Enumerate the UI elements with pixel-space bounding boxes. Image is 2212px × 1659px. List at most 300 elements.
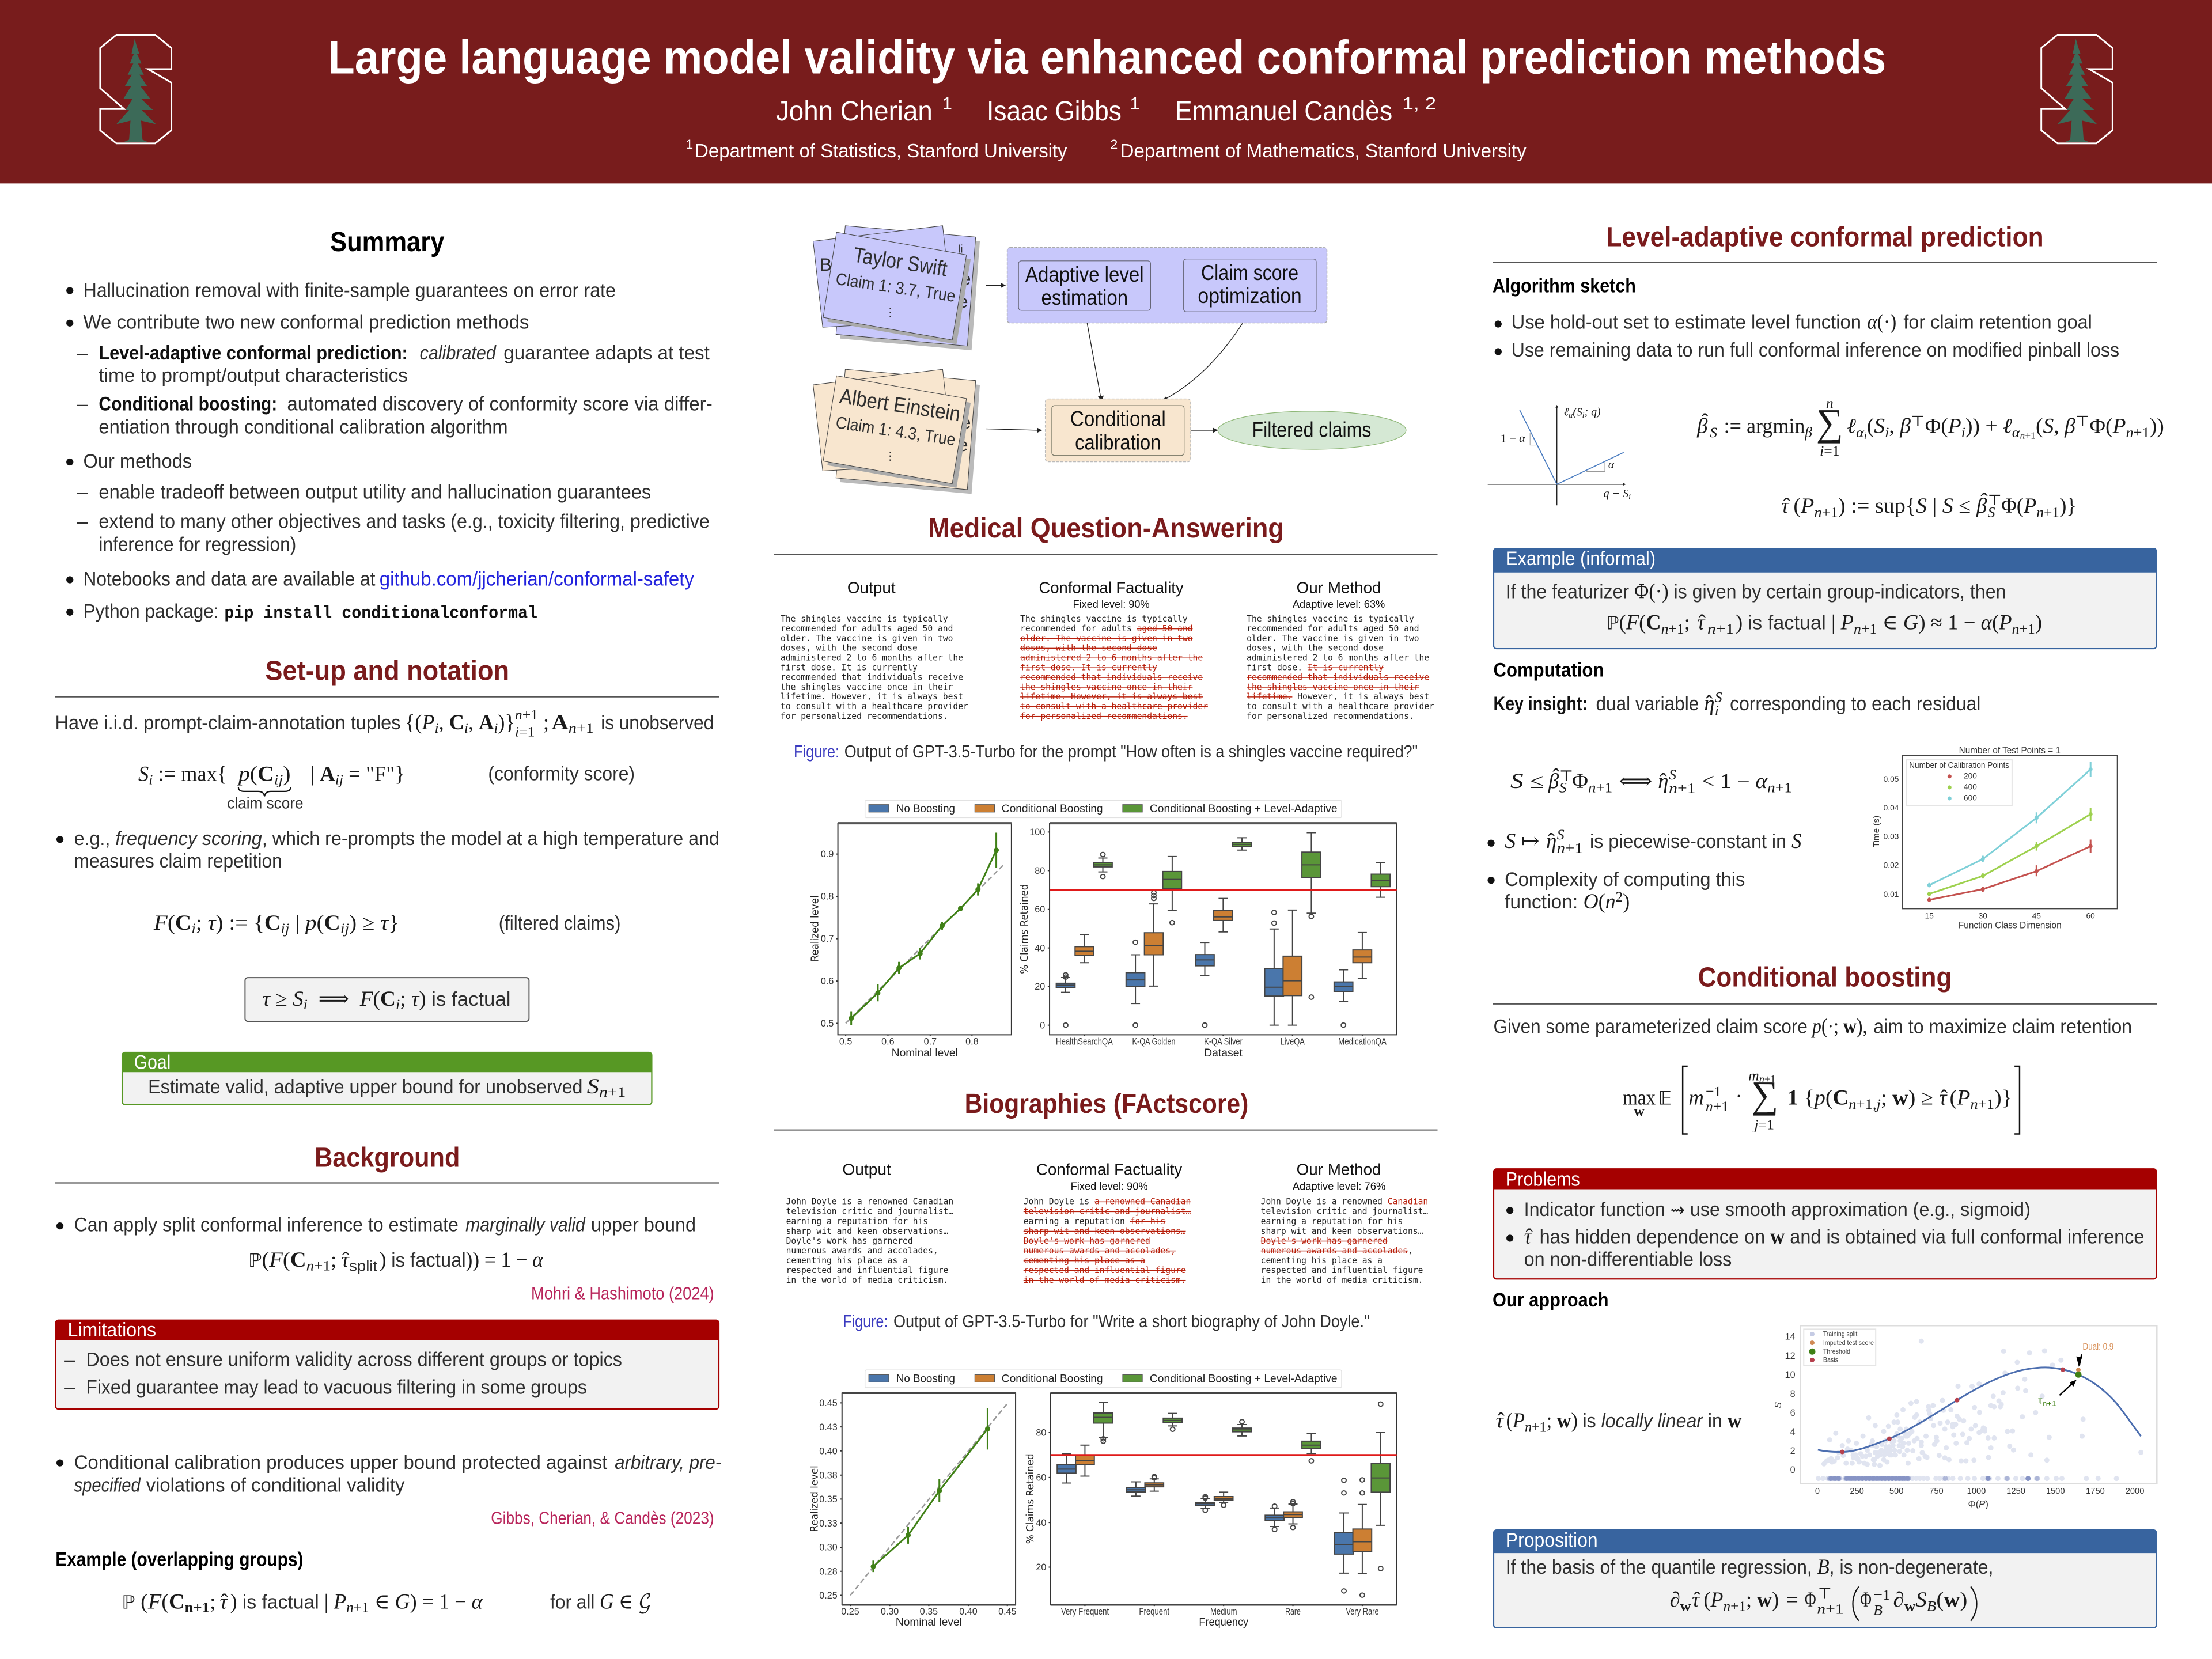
proposition block: τ <box>1692 1588 1700 1611</box>
objective formula: ∑ <box>1751 1074 1778 1116</box>
bio example: Our Method <box>1261 1160 1428 1285</box>
proposition block: n+1 <box>1817 1600 1844 1617</box>
scatter plot: quantile regression: 0 <box>1815 1487 1820 1496</box>
proposition block: Φ <box>1860 1588 1872 1611</box>
output example: Output: first dose. It is currently <box>781 663 918 673</box>
proposition block: −1 <box>1873 1586 1891 1603</box>
overlapping groups formula: ℙ (F(C <box>122 1590 184 1613</box>
locally linear statement: +1 <box>1532 1418 1547 1435</box>
claim score box: Claim score <box>1201 261 1298 285</box>
legend: Conditional Boosting <box>1002 802 1103 815</box>
proposition block: n <box>1723 1597 1730 1614</box>
scatter plot: quantile regression: 500 <box>1889 1487 1903 1496</box>
scatter plot: quantile regression: 8 <box>1790 1389 1796 1399</box>
calibration line chart <box>809 823 1012 1059</box>
authors: Emmanuel Candès <box>1175 96 1392 127</box>
output example: Conformal Factuality: The shingles vaccine is typically <box>1020 614 1188 624</box>
computation bullets: function: O(n <box>1505 889 1616 913</box>
objective formula: m <box>1748 1067 1759 1084</box>
sub-heading: our approach: Our approach <box>1493 1289 1609 1311</box>
example block: ℙ(F(C <box>1606 611 1661 634</box>
example block: If the featurizer Φ(·) is given by certain group-indicators, then <box>1506 579 2006 603</box>
runtime line chart <box>1872 745 2118 930</box>
goal block: n <box>599 1084 608 1100</box>
bio example: Output: respected and influential figure <box>786 1266 948 1275</box>
box plot: claims retained by dataset: 80 <box>1035 866 1045 876</box>
output example: Our Method: lifetime. However, it is always best <box>1247 692 1429 702</box>
objective formula: w <box>1634 1103 1645 1119</box>
pinball loss sketch: i <box>1628 493 1631 501</box>
goal block: Estimate valid, adaptive upper bound for unobserved <box>148 1076 582 1098</box>
calibration line chart: 0.30 <box>881 1607 899 1617</box>
arrows between stages <box>986 283 1250 432</box>
objective formula: n+1 <box>1706 1098 1729 1115</box>
citation: Mohri & Hashimoto (2024) <box>531 1284 714 1304</box>
goal block: S <box>587 1074 599 1098</box>
summary bullets: – <box>77 342 88 364</box>
algorithm bullets: α(·) <box>1867 310 1896 334</box>
split conformal bullet: Can apply split conformal inference to estimate <box>74 1214 459 1236</box>
card stack: Albert Einstein: ⋮ <box>885 449 896 463</box>
runtime line chart: 0.03 <box>1884 832 1899 841</box>
legend: No Boosting <box>896 1373 955 1385</box>
card stack: Taylor Swift: B <box>820 254 832 275</box>
intro sentence: aim to maximize claim retention <box>1873 1016 2132 1038</box>
panel: background <box>55 1142 721 1616</box>
calibration line chart: 0.8 <box>821 892 834 902</box>
output example: Our Method: for personalized recommendations. <box>1247 711 1414 721</box>
box plot: claims retained by dataset: LiveQA <box>1281 1037 1305 1047</box>
runtime line chart: 15 <box>1925 911 1934 920</box>
intro sentence: p(·; w), <box>1810 1014 1867 1038</box>
filtered claims formula: ij <box>281 920 289 937</box>
summary bullets: time to prompt/output characteristics <box>99 365 408 387</box>
pinball loss sketch: ; q) <box>1585 406 1601 418</box>
adaptive level box: Adaptive level <box>1025 263 1144 286</box>
scatter plot: quantile regression: 1250 <box>2006 1487 2025 1496</box>
argmin formula: i <box>1885 424 1889 441</box>
claim score box: optimization <box>1198 284 1302 308</box>
proposition block: ˆ <box>1694 1588 1700 1611</box>
split conformal bullet: marginally valid <box>465 1214 586 1236</box>
conformity score formula: (conformity score) <box>488 763 635 785</box>
filtered claims formula: | <box>289 911 305 934</box>
tuples sentence: ; <box>543 710 549 734</box>
box plot: claims retained by dataset: 20 <box>1035 982 1045 992</box>
summary bullets <box>66 279 713 623</box>
summary bullets: Conditional boosting: <box>99 393 277 415</box>
calibration line chart: 0.33 <box>819 1518 838 1529</box>
calibration line chart: 0.5 <box>821 1018 834 1029</box>
output example: Output: the shingles vaccine once in their <box>781 682 953 692</box>
tuples sentence: i <box>464 719 468 736</box>
scatter plot: quantile regression: 750 <box>1929 1487 1944 1496</box>
bio example: Our Method: television critic and journalist… <box>1261 1207 1428 1217</box>
scatter plot: quantile regression: 1000 <box>1967 1487 1986 1496</box>
limitations block: Limitations <box>68 1319 156 1341</box>
limitations block: – <box>64 1377 75 1399</box>
box plot: claims retained by dataset: 40 <box>1035 943 1045 953</box>
example block: n <box>1661 620 1668 637</box>
argmin formula: i <box>1961 424 1965 441</box>
output example: Output: to consult with a healthcare provider <box>781 702 968 711</box>
output example: Output: Output <box>847 578 896 596</box>
summary bullets: Python package: <box>83 601 219 623</box>
filtered claims formula: F(C <box>154 911 190 934</box>
dual equivalence formula: S ≤ <box>1510 769 1544 793</box>
factual implication box: ⟹ <box>308 987 360 1010</box>
summary bullets: Level-adaptive conformal prediction: <box>99 342 408 364</box>
runtime line chart: 0.02 <box>1884 861 1899 869</box>
heading: level-adaptive: Level-adaptive conformal prediction <box>1606 222 2044 252</box>
argmin formula: S <box>1874 414 1885 438</box>
proposition block: +1 <box>1730 1597 1746 1614</box>
summary bullets: enable tradeoff between output utility and hallucination guarantees <box>99 481 651 503</box>
output example: Our Method: The shingles vaccine is typically <box>1247 614 1414 624</box>
locally linear statement: ˆ <box>1498 1408 1505 1432</box>
box plot: claims retained by frequency: Medium <box>1210 1607 1237 1617</box>
argmin formula: , <box>1889 414 1900 438</box>
header banner <box>0 0 2212 183</box>
output example: Our Method <box>1247 578 1434 721</box>
threshold formula: Φ(P <box>2001 494 2036 517</box>
claim score box <box>1184 259 1316 312</box>
runtime line chart: 400 <box>1964 782 1977 791</box>
calibration line chart: Realized level <box>809 895 821 961</box>
example block: n <box>1854 620 1861 637</box>
conformity score formula <box>138 762 635 812</box>
box plot: claims retained by dataset: 100 <box>1029 827 1045 838</box>
argmin formula: α <box>1856 424 1864 441</box>
proposition block: S <box>1915 1588 1927 1611</box>
summary bullets: guarantee adapts at test <box>503 342 710 364</box>
intro sentence <box>1493 1014 2132 1038</box>
card stack: Taylor Swift: e <box>958 291 968 312</box>
output example: Our Method: Adaptive level: 63% <box>1293 598 1385 610</box>
argmin formula: )) <box>2150 414 2164 438</box>
conditional calibration box <box>1046 399 1191 462</box>
locally linear statement: (P <box>1506 1408 1525 1432</box>
objective formula: )} <box>1994 1086 2012 1109</box>
objective formula <box>1623 1066 2020 1134</box>
summary bullets: github.com/jjcherian/conformal-safety <box>380 568 695 590</box>
legend <box>865 800 1342 817</box>
computation bullets: ˆ <box>1548 829 1555 853</box>
panel: biographies <box>774 1089 1438 1628</box>
dual equivalence formula: β <box>1548 769 1559 793</box>
summary bullets: entiation through conditional calibration algorithm <box>99 416 508 438</box>
box plot: claims retained by frequency: Frequent <box>1139 1607 1169 1617</box>
summary bullets: – <box>77 510 88 532</box>
conformity score formula: = "F"} <box>343 762 405 786</box>
scatter plot: quantile regression: 10 <box>1785 1370 1796 1380</box>
key insight: i <box>1715 702 1719 719</box>
dual equivalence formula: ⟺ <box>1619 769 1652 793</box>
output example: Conformal Factuality: first dose. It is currently <box>1020 663 1157 673</box>
box plot: claims retained by frequency <box>1024 1393 1397 1628</box>
conformity score formula: ij <box>335 771 343 788</box>
key insight: η <box>1704 691 1715 715</box>
pinball loss sketch: (S <box>1573 406 1582 418</box>
conditional calibration bullet: Conditional calibration produces upper bound protected against <box>74 1452 608 1474</box>
icon: Stanford logo right <box>2041 35 2112 143</box>
example block: ˆ <box>1699 611 1706 634</box>
dual equivalence formula: +1 <box>1775 779 1792 796</box>
calibration line chart: 0.8 <box>965 1037 979 1047</box>
filtered claims formula <box>153 911 621 937</box>
argmin formula: +1 <box>2134 424 2150 441</box>
box plot: claims retained by frequency: Frequency <box>1199 1616 1248 1628</box>
output example: Conformal Factuality: Fixed level: 90% <box>1073 598 1150 610</box>
summary bullets: Our methods <box>83 450 192 472</box>
output example: Output: The shingles vaccine is typically <box>781 614 948 624</box>
threshold formula: τ <box>1781 494 1790 517</box>
bio example: Conformal Factuality: Fixed level: 90% <box>1071 1180 1148 1192</box>
box plot: claims retained by dataset: 0 <box>1040 1020 1045 1031</box>
bio example: Conformal Factuality: in the world of media criticism. <box>1024 1275 1186 1285</box>
frequency scoring bullet: e.g., frequency scoring, which re-prompts the model at a high temperature and <box>74 828 719 850</box>
runtime line chart: 200 <box>1964 771 1977 780</box>
key insight: ˆ <box>1706 691 1713 715</box>
objective formula: n <box>1759 1073 1764 1085</box>
locally linear statement <box>1496 1408 1742 1435</box>
scatter plot: quantile regression: 250 <box>1850 1487 1864 1496</box>
panel: pipeline diagram <box>813 226 1406 494</box>
example block: ∈ <box>1877 611 1903 634</box>
factual implication box: τ ≥ S <box>263 987 303 1010</box>
output example: Our Method: to consult with a healthcare provider <box>1247 702 1434 711</box>
runtime line chart: Time (s) <box>1872 816 1881 847</box>
factual implication box: τ) is factual <box>411 987 509 1010</box>
overlapping groups formula: ) is factual | P <box>230 1590 347 1613</box>
dual equivalence formula: < 1 − α <box>1702 769 1767 793</box>
card stack: Albert Einstein: Albert Einstein <box>838 384 962 426</box>
bio example: Our Method: John Doyle is a renowned Canadian <box>1261 1197 1428 1207</box>
output example: Output: doses, with the second dose <box>781 643 918 653</box>
scatter plot: quantile regression: 12 <box>1785 1351 1796 1361</box>
sub-heading: algorithm sketch: Algorithm sketch <box>1493 275 1636 297</box>
argmin formula: P <box>2112 414 2126 438</box>
tuples sentence: i <box>494 719 498 736</box>
scatter plot: quantile regression: n+1 <box>2043 1400 2056 1407</box>
threshold formula: S | S ≤ <box>1916 494 1970 517</box>
objective formula: max <box>1623 1086 1656 1109</box>
split formula: ˆ <box>342 1248 349 1271</box>
authors: 1 <box>1130 94 1140 113</box>
output example: Conformal Factuality: recommended for adults aged 50 and <box>1020 624 1192 634</box>
tuples sentence: i=1 <box>515 723 535 740</box>
bio example: Our Method: earning a reputation for his <box>1261 1217 1403 1226</box>
computation bullets: S <box>1557 826 1565 843</box>
pinball loss sketch: α <box>1569 411 1573 419</box>
adaptive level box: estimation <box>1041 286 1128 309</box>
proposition block: w <box>1680 1597 1691 1614</box>
threshold formula: S <box>1988 503 1995 520</box>
heading: summary: Summary <box>330 227 445 257</box>
authors: John Cherian <box>776 96 933 127</box>
argmin formula: ℓ <box>1847 414 1857 438</box>
box plot: claims retained by frequency: 60 <box>1036 1472 1046 1483</box>
conformity score formula: ) <box>283 762 290 786</box>
overlapping groups formula: +1 <box>354 1599 369 1616</box>
bio example: Conformal Factuality <box>1024 1160 1191 1285</box>
bio example: Output: Doyle's work has garnered <box>786 1236 913 1246</box>
box plot: claims retained by frequency: 80 <box>1036 1428 1046 1438</box>
filtered claims formula: (filtered claims) <box>499 912 621 934</box>
heading: conditional boosting: Conditional boosting <box>1698 963 1952 993</box>
computation bullets: η <box>1546 829 1556 853</box>
objective formula: −1 <box>1706 1083 1721 1100</box>
example block: ) is factual | P <box>1736 611 1854 634</box>
card stack: Albert Einstein <box>813 369 980 494</box>
box plot: claims retained by dataset: % Claims Retained <box>1018 884 1031 974</box>
conformity score formula: := max{ <box>153 762 227 786</box>
calibration line chart <box>808 1393 1017 1628</box>
affiliations <box>685 137 1527 162</box>
scatter plot: quantile regression: Dual: 0.9 <box>2082 1342 2113 1352</box>
computation bullets: ) <box>1623 889 1630 913</box>
example block: +1 <box>1668 620 1684 637</box>
proposition block: (P <box>1703 1588 1724 1611</box>
output example: Conformal Factuality: to consult with a healthcare provider <box>1020 702 1208 711</box>
bio example: Output: television critic and journalist… <box>786 1207 953 1217</box>
box plot: claims retained by frequency: % Claims Retained <box>1024 1453 1036 1544</box>
calibration line chart: 0.40 <box>819 1446 838 1456</box>
argmin formula: ℓ <box>2003 414 2012 438</box>
limitations block: Does not ensure uniform validity across different groups or topics <box>86 1349 622 1371</box>
filtered claims formula: i <box>191 920 196 937</box>
figure caption: Figure: <box>794 742 839 762</box>
panel: level-adaptive conformal prediction <box>1487 222 2164 930</box>
split formula: ) is factual)) = 1 − α <box>380 1248 544 1271</box>
example block: n+1 <box>1707 620 1734 637</box>
calibration line chart: 0.43 <box>819 1422 838 1433</box>
output example: Conformal Factuality: doses, with the second dose <box>1020 643 1157 653</box>
box plot: claims retained by dataset <box>1018 823 1397 1059</box>
objective formula: w) ≥ <box>1892 1086 1932 1109</box>
intro sentence: Given some parameterized claim score <box>1493 1016 1808 1038</box>
frequency scoring bullet <box>56 828 719 872</box>
threshold formula: ) := sup{ <box>1838 494 1916 517</box>
sub-heading: computation: Computation <box>1493 659 1604 681</box>
split conformal bullet <box>56 1214 696 1236</box>
proposition block: ∂ <box>1670 1588 1680 1611</box>
conditional calibration bullet <box>56 1452 721 1497</box>
bio example: Output: numerous awards and accolades, <box>786 1246 938 1256</box>
argmin formula: i=1 <box>1820 442 1840 459</box>
pinball loss sketch: i <box>1582 411 1585 419</box>
panel: set-up and notation <box>55 656 719 1105</box>
card stack: Taylor Swift: e <box>961 268 971 289</box>
argmin formula <box>1696 395 2164 459</box>
problems block: τ <box>1524 1224 1533 1248</box>
summary bullets: automated discovery of conformity score via differ- <box>287 393 713 415</box>
example block: G) ≈ 1 − α(P <box>1903 611 2012 634</box>
example block: ) <box>2035 611 2042 634</box>
output example: Our Method: Our Method <box>1297 578 1381 596</box>
scatter plot: quantile regression: 2000 <box>2126 1487 2144 1496</box>
summary bullets: – <box>77 393 88 415</box>
summary bullets: We contribute two new conformal prediction methods <box>83 312 529 334</box>
card stack: Taylor Swift: Taylor Swift <box>852 243 949 281</box>
threshold formula: )} <box>2059 494 2077 517</box>
output example: Output: recommended for adults aged 50 and <box>781 624 953 634</box>
objective formula: +1 <box>1978 1096 1994 1112</box>
objective formula: n <box>1970 1096 1978 1112</box>
output example: Conformal Factuality: administered 2 to 6 months after the <box>1020 653 1203 663</box>
conditional calibration box: Conditional <box>1070 407 1166 431</box>
bio example: Conformal Factuality: respected and influential figure <box>1024 1266 1186 1275</box>
pinball loss sketch: q − S <box>1604 488 1628 500</box>
figure caption: Output of GPT-3.5-Turbo for "Write a short biography of John Doyle." <box>893 1312 1370 1331</box>
argmin formula: )) + <box>1965 414 2003 438</box>
problems block: has hidden dependence on w and is obtained via full conformal inference <box>1540 1224 2144 1248</box>
threshold formula: n <box>1814 503 1822 520</box>
tuples sentence: , <box>439 710 449 734</box>
example block: +1 <box>1861 620 1877 637</box>
threshold formula: ˆ <box>1783 494 1790 517</box>
tuples sentence <box>55 706 714 740</box>
runtime line chart: Function Class Dimension <box>1959 920 2062 930</box>
argmin formula: β <box>1899 414 1911 438</box>
bio example: Conformal Factuality: cementing his place as a <box>1024 1256 1145 1266</box>
bio example: Our Method: Our Method <box>1297 1160 1381 1178</box>
computation bullets: n+1 <box>1557 839 1583 856</box>
calibration line chart: 0.7 <box>924 1037 937 1047</box>
panel: conditional boosting <box>1493 963 2157 1628</box>
output example: Output: lifetime. However, it is always best <box>781 692 963 702</box>
objective formula: 𝔼 <box>1658 1088 1672 1109</box>
split formula: n <box>306 1257 314 1274</box>
scatter plot: quantile regression: Φ(P) <box>1968 1498 1988 1509</box>
calibration line chart: 0.38 <box>819 1470 838 1480</box>
box plot: claims retained by frequency: Rare <box>1285 1607 1301 1617</box>
calibration line chart: 0.30 <box>819 1543 838 1553</box>
dual equivalence formula: ⊤ <box>1559 767 1573 784</box>
argmin formula: ˆ <box>1701 409 1709 433</box>
icon: Stanford logo left <box>100 35 172 143</box>
proposition block: If the basis of the quantile regression, B, is non-degenerate, <box>1506 1555 1993 1578</box>
output example: Conformal Factuality: the shingles vaccine once in their <box>1020 682 1193 692</box>
argmin formula: β <box>1804 424 1812 441</box>
factual implication box: i <box>396 996 400 1013</box>
runtime line chart: 30 <box>1979 911 1987 920</box>
conformity score formula: ij <box>274 771 283 788</box>
figure caption: Output of GPT-3.5-Turbo for the prompt "How often is a shingles vaccine required?" <box>844 742 1418 762</box>
conditional calibration bullet: violations of conditional validity <box>146 1475 405 1497</box>
scatter plot: quantile regression: 14 <box>1785 1332 1796 1342</box>
output example: Our Method: doses, with the second dose <box>1247 643 1384 653</box>
bio example: Conformal Factuality: Conformal Factuality <box>1036 1160 1182 1178</box>
argmin formula: n <box>2126 424 2134 441</box>
problems block: on non-differentiable loss <box>1524 1249 1732 1271</box>
split formula: split <box>349 1259 377 1275</box>
proposition block: w) <box>1944 1588 1967 1611</box>
proposition block: ( <box>1936 1588 1944 1611</box>
output example: Conformal Factuality: Conformal Factuality <box>1039 578 1184 596</box>
summary bullets: Hallucination removal with finite-sample guarantees on error rate <box>83 279 616 301</box>
output example: Our Method: recommended that individuals receive <box>1247 672 1429 682</box>
conditional calibration bullet: arbitrary, pre- <box>615 1452 721 1474</box>
affiliations: 2 <box>1110 137 1118 151</box>
tuples sentence: {(P <box>405 710 435 734</box>
split conformal bullet: upper bound <box>591 1214 696 1236</box>
output example: Our Method: recommended for adults aged 50 and <box>1247 624 1419 634</box>
problems block <box>1494 1169 2157 1279</box>
scatter plot: quantile regression: 6 <box>1790 1408 1796 1418</box>
threshold formula: +1 <box>2044 503 2059 520</box>
objective formula: (P <box>1949 1086 1970 1109</box>
